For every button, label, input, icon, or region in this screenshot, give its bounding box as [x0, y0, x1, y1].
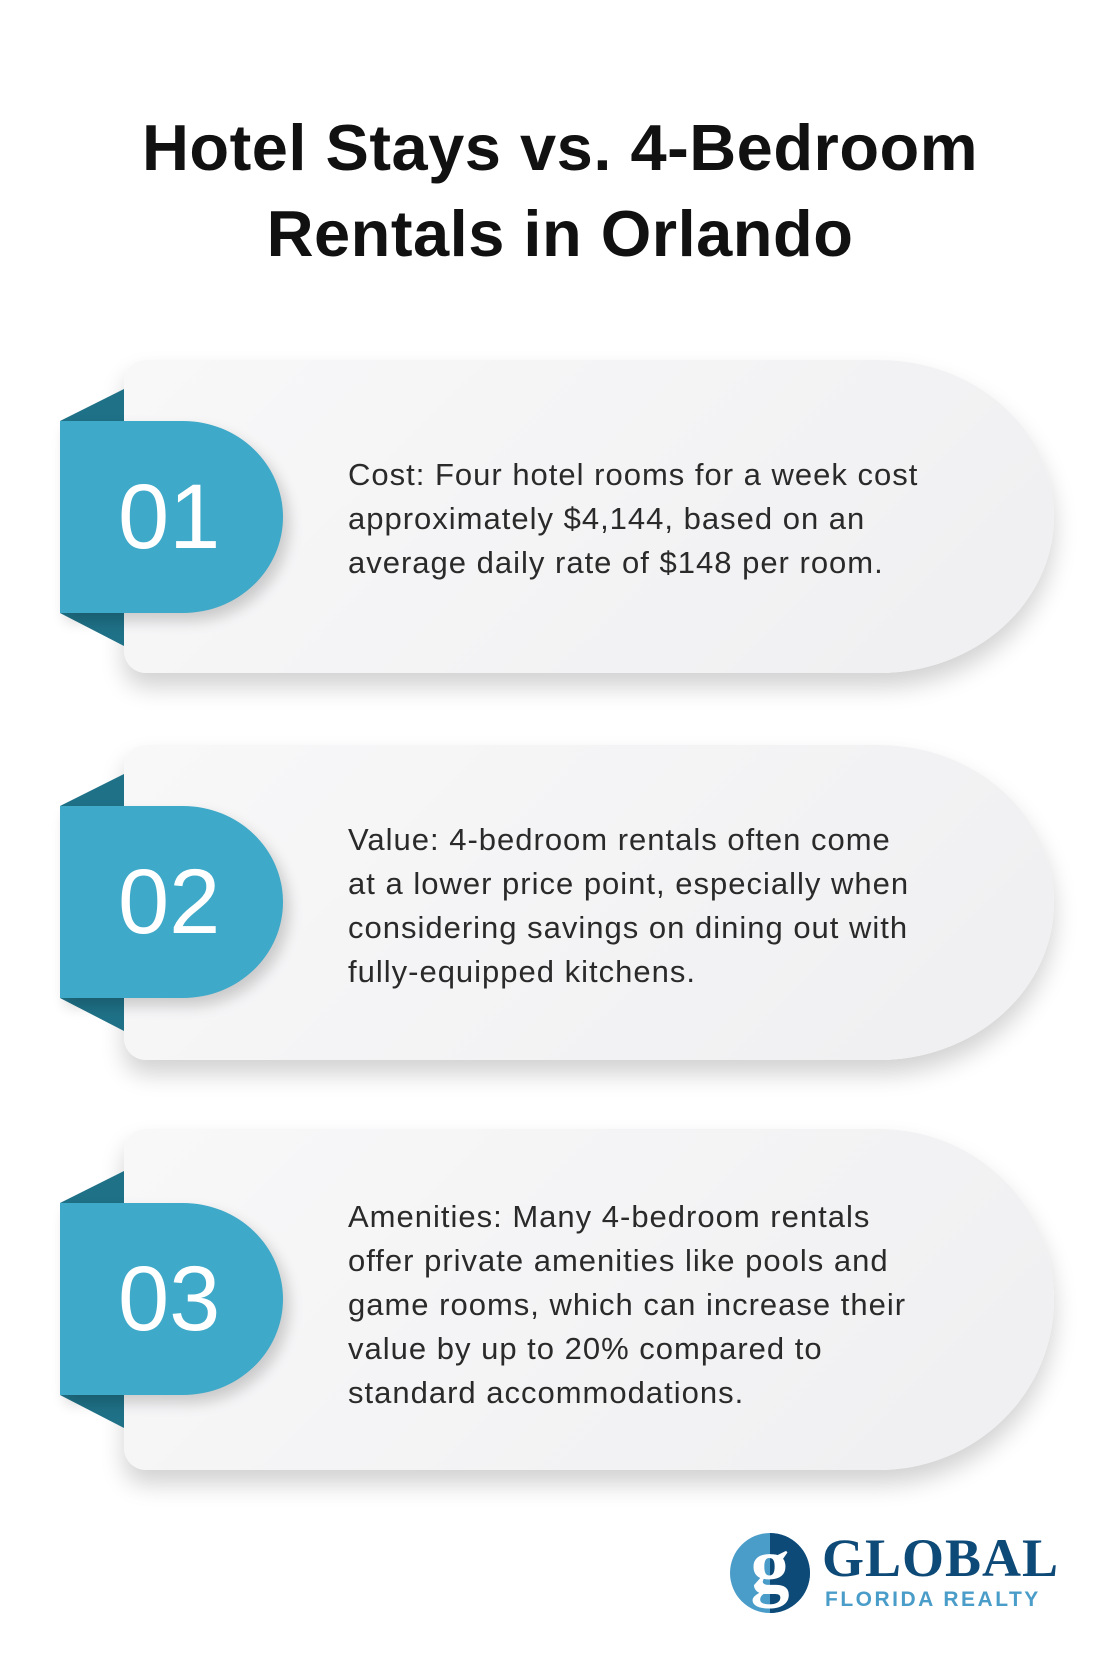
fold triangles: [60, 1171, 124, 1428]
number tab 02: 02: [118, 851, 220, 953]
title: [142, 111, 978, 270]
number tab 01: [60, 421, 283, 613]
number tab 01: 01: [118, 466, 220, 568]
logo: [730, 1528, 1059, 1613]
text block: Cost: Four hotel rooms for a week cost approximately $4,144, based on an average daily rate of $148 per room.: [348, 457, 918, 580]
card background: [124, 745, 1054, 1060]
number tab 02: [60, 806, 283, 998]
panel: value: [60, 745, 1064, 1084]
title: Rentals in Orlando: [267, 197, 853, 270]
card background: [124, 1129, 1054, 1470]
text block: Value: 4-bedroom rentals often come at a lower price point, especially when considering savings on dining out with fully-equipped kitchens.: [348, 822, 909, 989]
panel: amenities: [60, 1129, 1064, 1494]
fold triangles: [60, 389, 124, 646]
icon: g circle: [730, 1531, 810, 1613]
card background: [124, 360, 1054, 673]
panel: cost: [60, 360, 1064, 697]
fold triangles: [60, 774, 124, 1031]
title: Hotel Stays vs. 4-Bedroom: [142, 111, 978, 184]
logo text: GLOBAL: [822, 1528, 1059, 1588]
number tab 03: [60, 1203, 283, 1395]
logo: FLORIDA REALTY: [825, 1588, 1041, 1611]
number tab 03: 03: [118, 1248, 220, 1350]
text block: Amenities: Many 4-bedroom rentals offer private amenities like pools and game rooms, which can increase their value by up to 20% compared to standard accommodations.: [348, 1199, 906, 1410]
